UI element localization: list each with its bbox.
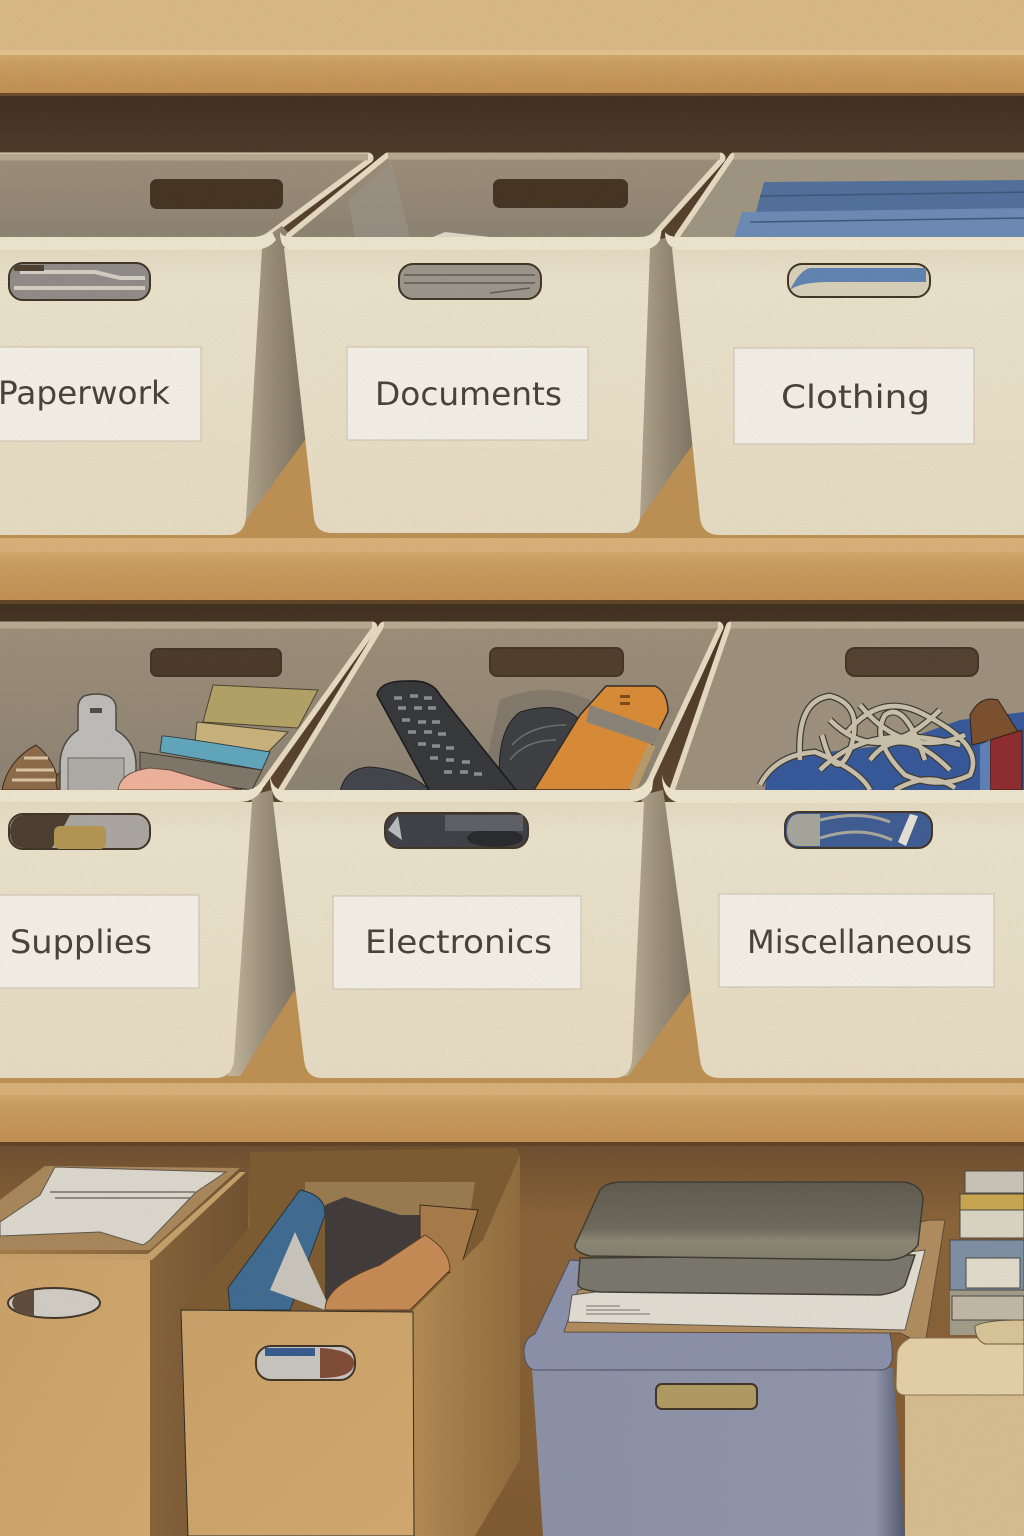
front handle with papers	[9, 263, 150, 300]
bin: Paperwork	[0, 157, 368, 535]
papers	[0, 1167, 226, 1245]
round grey device	[499, 708, 580, 790]
lower grey case	[578, 1255, 915, 1295]
back handle	[151, 180, 282, 208]
box: left kraft box with papers	[0, 1166, 248, 1536]
brown and red items	[970, 699, 1022, 790]
bin: Supplies	[0, 625, 372, 1078]
upper grey case	[575, 1182, 923, 1260]
handle	[8, 1288, 100, 1318]
front handle with dark devices	[385, 813, 528, 848]
yellow sponge blocks	[195, 685, 318, 752]
contents: tablet and rolls	[228, 1190, 478, 1310]
label: Paperwork: Paperwork	[0, 374, 170, 412]
label: Miscellaneous	[719, 894, 994, 987]
label: Electronics: Electronics	[365, 923, 552, 961]
label: Clothing: Clothing	[781, 378, 930, 416]
label: Clothing	[734, 348, 974, 444]
stacked pouches	[118, 736, 270, 790]
black device left	[340, 767, 432, 792]
front handle with cables	[785, 812, 932, 848]
stack: small boxes and notebooks	[950, 1171, 1024, 1344]
front handle with bottles	[9, 814, 150, 849]
panel: upper back wall	[0, 96, 1024, 446]
back handle	[494, 180, 627, 207]
panel: middle back wall	[0, 604, 1024, 974]
label: Electronics	[333, 896, 581, 989]
front handle with folded items	[399, 264, 541, 299]
panel: top wood shelf	[0, 0, 1024, 96]
tangled cables	[760, 696, 973, 790]
blue bag	[765, 712, 1024, 790]
dark shadow	[480, 690, 590, 790]
panel: upper shelf board	[0, 440, 1024, 604]
orange device	[534, 686, 668, 790]
handle	[256, 1346, 355, 1380]
box: cream box on right	[896, 1338, 1024, 1536]
white bottle	[60, 694, 136, 792]
box: tall kraft box with contents	[181, 1148, 520, 1536]
bin: Electronics	[270, 625, 718, 1078]
label: Paperwork	[0, 347, 201, 441]
label: Documents: Documents	[375, 375, 562, 413]
bin: Miscellaneous	[662, 625, 1024, 1078]
back handle	[846, 648, 978, 676]
handle	[656, 1384, 757, 1409]
label: Miscellaneous: Miscellaneous	[747, 923, 972, 961]
label: Supplies: Supplies	[10, 923, 152, 961]
front handle with blue cloth	[788, 264, 930, 297]
bin: Clothing	[665, 156, 1024, 535]
panel: middle shelf board	[0, 960, 1024, 1146]
back handle	[151, 649, 281, 676]
label: Supplies	[0, 895, 199, 988]
label: Documents	[347, 347, 588, 440]
panel: lower back wall	[0, 1146, 1024, 1536]
paper inside	[433, 232, 490, 237]
bin: Documents	[280, 156, 720, 533]
remote control	[377, 681, 516, 792]
small brown bottles	[2, 745, 88, 798]
box: blue plastic bin with lid	[524, 1260, 905, 1536]
interior shadow	[348, 162, 410, 237]
folded blue clothing	[734, 180, 1024, 238]
back handle	[490, 648, 623, 676]
stack: papers and grey cases	[564, 1182, 945, 1345]
